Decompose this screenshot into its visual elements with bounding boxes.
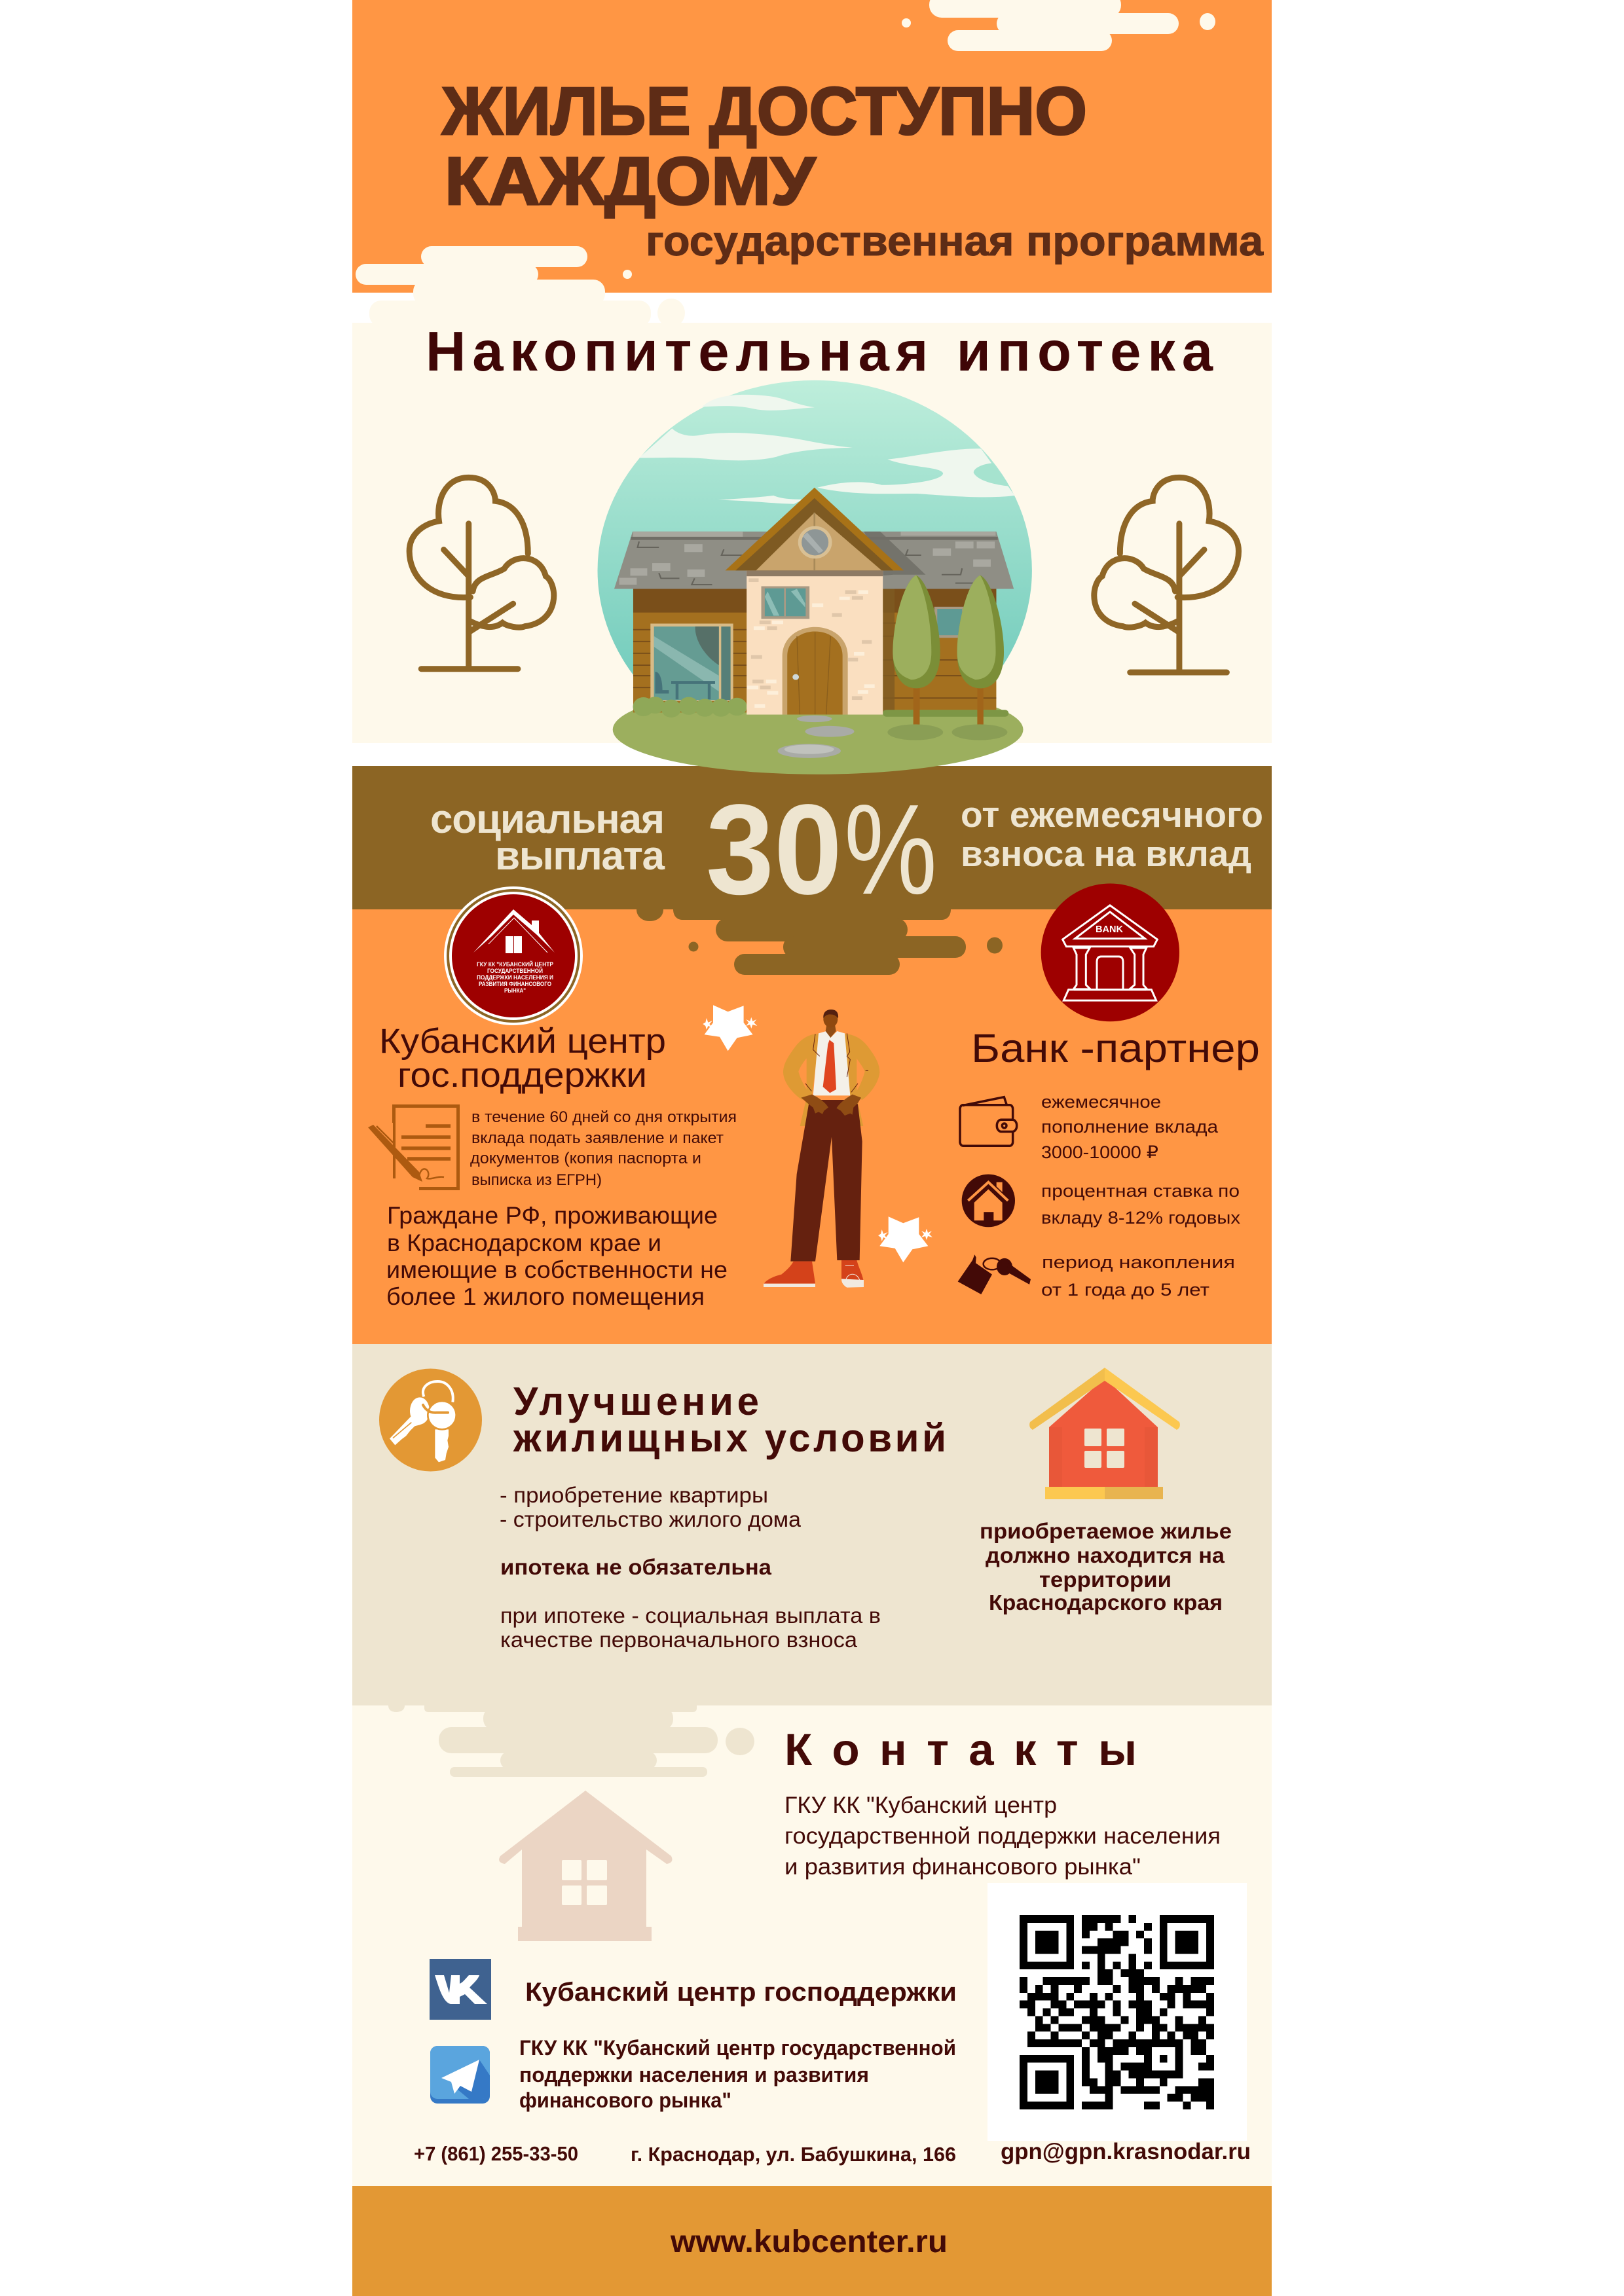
text: purchase options: качестве первоначального взноса	[500, 1628, 858, 1652]
icon: star with sparkles (left)	[703, 1005, 757, 1051]
heading: Kuban centre: Кубанский центр	[379, 1022, 666, 1061]
heading: partner bank: Банк -партнер	[971, 1026, 1260, 1070]
icon: faded house	[499, 1791, 672, 1941]
panel: contacts	[352, 1705, 1272, 2186]
text: housing location: приобретаемое жилье	[980, 1519, 1232, 1543]
icon: right outline tree	[1094, 477, 1238, 672]
panel: header	[352, 0, 1272, 293]
door	[783, 627, 848, 715]
text: monthly deposit: ежемесячное	[1041, 1092, 1161, 1112]
payment label right: взноса на вклад	[961, 833, 1251, 874]
title: ЖИЛЬЕ ДОСТУПНО	[441, 73, 1087, 149]
title	[441, 73, 1087, 219]
icon: left outline tree	[409, 477, 554, 669]
text: housing location: территории	[1039, 1567, 1172, 1592]
text: saving period: период накопления	[1042, 1252, 1235, 1272]
text: eligible citizens: Граждане РФ, проживающие	[387, 1202, 718, 1229]
big number 30%: %	[844, 778, 937, 921]
illustration: house scene	[598, 380, 1032, 774]
text: application deadline	[470, 1108, 737, 1189]
text: purchase options: - строительство жилого дома	[500, 1507, 802, 1531]
logo: Kuban centre stamp	[444, 886, 583, 1025]
text: application deadline: документов (копия паспорта и	[470, 1150, 701, 1167]
logo: Kuban centre stamp: ПОДДЕРЖКИ НАСЕЛЕНИЯ И	[477, 974, 553, 981]
panel: social payment band	[352, 766, 1272, 921]
roof	[614, 532, 1014, 589]
text: address: г. Краснодар, ул. Бабушкина, 166	[631, 2143, 956, 2166]
icon: wallet	[960, 1097, 1017, 1146]
heading: improving conditions	[513, 1379, 946, 1460]
upper window	[762, 586, 809, 619]
payment label right	[961, 794, 1263, 874]
icon: house in circle	[962, 1175, 1015, 1227]
logo: Kuban centre stamp: РАЗВИТИЯ ФИНАНСОВОГО	[479, 981, 551, 987]
text: monthly deposit	[1041, 1092, 1219, 1162]
text: Telegram name: финансового рынка"	[519, 2088, 731, 2112]
gable	[726, 488, 904, 570]
big number 30%	[706, 778, 937, 921]
logo: Kuban centre stamp: РЫНКА"	[504, 987, 526, 994]
text: VK name: Кубанский центр господдержки	[525, 1978, 957, 2007]
text: application deadline: вклада подать заявление и пакет	[471, 1129, 724, 1147]
text: purchase options: ипотека не обязательна	[500, 1555, 772, 1579]
QR code	[987, 1883, 1247, 2141]
payment label left: выплата	[495, 833, 665, 879]
icon: keys in circle	[379, 1368, 482, 1472]
heading: improving conditions: жилищных условий	[513, 1416, 946, 1460]
title: КАЖДОМУ	[445, 143, 817, 219]
icon: house tag and key	[958, 1254, 1031, 1294]
text: eligible citizens: в Краснодарском крае и	[387, 1230, 661, 1256]
panel: footer	[352, 2186, 1272, 2296]
text: website: www.kubcenter.ru	[670, 2225, 948, 2259]
stepping stones	[797, 716, 832, 722]
text: interest rate	[1041, 1181, 1241, 1228]
text: Telegram name: поддержки населения и развития	[519, 2063, 869, 2086]
text: housing location	[980, 1519, 1232, 1614]
text: eligible citizens	[386, 1202, 728, 1310]
heading: Kuban centre: гос.поддержки	[397, 1056, 647, 1095]
text: saving period: от 1 года до 5 лет	[1041, 1280, 1209, 1300]
big number 30%: 30	[706, 778, 842, 921]
big window	[650, 624, 733, 701]
icon: star with sparkles (right)	[878, 1216, 932, 1262]
panel: improving living conditions	[352, 1344, 1272, 1705]
payment drips	[637, 909, 1003, 975]
illustration: standing man	[764, 1010, 879, 1288]
text: application deadline: выписка из ЕГРН)	[471, 1171, 602, 1189]
heading: improving conditions: Улучшение	[513, 1379, 759, 1423]
text: purchase options: при ипотеке - социальная выплата в	[500, 1603, 881, 1628]
icon: bank emblem	[1041, 883, 1179, 1021]
text: Telegram name: ГКУ КК "Кубанский центр государственной	[519, 2036, 956, 2060]
subtitle: государственная программа	[646, 217, 1263, 264]
heading: contacts: К о н т а к т ы	[784, 1724, 1137, 1775]
grass island	[613, 685, 1024, 774]
logo: Kuban centre stamp: ГОСУДАРСТВЕННОЙ	[487, 967, 543, 974]
icon: Telegram	[430, 2046, 490, 2104]
text: monthly deposit: 3000-10000 ₽	[1041, 1142, 1158, 1162]
clouds: header bottom left	[356, 246, 685, 327]
payment label left: социальная	[430, 797, 665, 842]
cypress trees	[913, 688, 919, 728]
panel: conditions orange	[352, 909, 1272, 1344]
payment label right: от ежемесячного	[961, 794, 1263, 835]
bushes	[633, 697, 747, 718]
text: interest rate: процентная ставка по	[1041, 1181, 1240, 1201]
text: purchase options	[500, 1483, 881, 1652]
text: organisation	[784, 1793, 1221, 1880]
text: housing location: Краснодарского края	[989, 1590, 1223, 1614]
icon: VK	[430, 1959, 491, 2020]
text: Telegram name	[519, 2036, 956, 2112]
panel: savings mortgage background	[352, 323, 1272, 743]
text: monthly deposit: пополнение вклада	[1041, 1117, 1219, 1137]
heading: Kuban centre	[379, 1022, 666, 1095]
text: organisation: и развития финансового рынка"	[784, 1854, 1141, 1880]
payment label left	[430, 797, 665, 879]
heading: savings mortgage: Накопительная ипотека	[426, 321, 1213, 383]
text: saving period	[1041, 1252, 1235, 1300]
text: eligible citizens: более 1 жилого помещения	[386, 1283, 705, 1310]
text: email: gpn@gpn.krasnodar.ru	[1001, 2139, 1251, 2164]
text: interest rate: вкладу 8-12% годовых	[1041, 1208, 1241, 1228]
clouds: top right	[902, 0, 1215, 51]
text: organisation: государственной поддержки населения	[784, 1823, 1221, 1849]
clouds: contacts	[388, 1705, 754, 1777]
central tower	[747, 570, 883, 715]
icon: red house	[1029, 1368, 1180, 1499]
icon: document with pen	[367, 1106, 458, 1192]
text: application deadline: в течение 60 дней со дня открытия	[471, 1108, 737, 1126]
icon: bank emblem: BANK	[1096, 924, 1123, 935]
text: housing location: должно находится на	[986, 1543, 1225, 1567]
logo: Kuban centre stamp: ГКУ КК "КУБАНСКИЙ ЦЕНТР	[477, 960, 553, 968]
text: phone: +7 (861) 255-33-50	[414, 2142, 578, 2165]
text: organisation: ГКУ КК "Кубанский центр	[784, 1793, 1057, 1818]
walls	[633, 587, 747, 712]
text: purchase options: - приобретение квартиры	[500, 1483, 768, 1507]
side window	[934, 607, 963, 638]
text: eligible citizens: имеющие в собственности не	[386, 1256, 728, 1283]
